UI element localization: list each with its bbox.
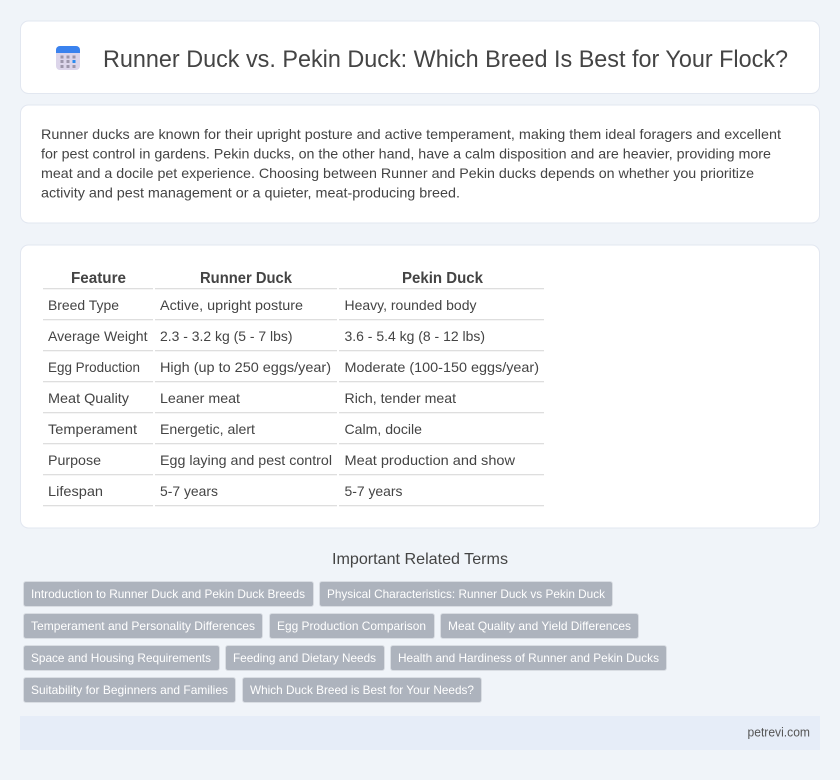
row: egg production <box>48 359 539 375</box>
row: average weight: Average Weight <box>48 328 148 344</box>
title: Runner Duck vs. Pekin Duck: Which Breed Is Best for Your Flock? <box>103 46 788 73</box>
row: average weight <box>48 328 485 344</box>
intro paragraph: Runner ducks are known for their upright posture and active temperament, making them ideal foragers and excellent <box>41 126 781 142</box>
table header row <box>71 270 483 287</box>
row: temperament <box>48 421 422 437</box>
tag list: Egg Production Comparison <box>277 619 426 633</box>
footer <box>20 716 820 750</box>
table header row: Runner Duck <box>200 270 292 287</box>
tag list: Which Duck Breed is Best for Your Needs? <box>250 683 474 697</box>
row: purpose: Purpose <box>48 452 101 468</box>
row: temperament: Energetic, alert <box>160 421 255 437</box>
row: temperament: Temperament <box>48 421 137 437</box>
panel: header <box>20 21 820 94</box>
table header row: Feature <box>71 270 126 287</box>
row: egg production: Egg Production <box>48 359 140 375</box>
intro paragraph: activity and pest management or a quieter, meat-producing breed. <box>41 184 460 200</box>
row: lifespan <box>48 483 402 499</box>
row: purpose <box>48 452 516 468</box>
row: temperament: Calm, docile <box>344 421 422 437</box>
tag list: Health and Hardiness of Runner and Pekin Ducks <box>398 651 659 665</box>
footer: site name: petrevi.com <box>748 726 810 740</box>
tag list: Temperament and Personality Differences <box>31 619 255 633</box>
icon: calendar <box>56 46 80 70</box>
tag list: Meat Quality and Yield Differences <box>448 619 631 633</box>
row: egg production: Moderate (100-150 eggs/year) <box>344 359 539 375</box>
row: lifespan: 5-7 years <box>344 483 402 499</box>
row: purpose: Meat production and show <box>344 452 516 468</box>
tag list: Physical Characteristics: Runner Duck vs Pekin Duck <box>327 587 606 601</box>
tag list <box>24 582 666 702</box>
row: meat quality: Rich, tender meat <box>344 390 456 406</box>
row: lifespan: 5-7 years <box>160 483 218 499</box>
panel: introduction <box>20 105 820 223</box>
tag list: Suitability for Beginners and Families <box>31 683 228 697</box>
intro paragraph: meat and a docile pet experience. Choosing between Runner and Pekin ducks depends on whether you prioritize <box>41 165 754 181</box>
tag list: Space and Housing Requirements <box>31 651 211 665</box>
row: breed type: Breed Type <box>48 297 119 313</box>
row: breed type: Active, upright posture <box>160 297 303 313</box>
row: average weight: 3.6 - 5.4 kg (8 - 12 lbs) <box>344 328 485 344</box>
table header row: Pekin Duck <box>402 270 483 287</box>
row: purpose: Egg laying and pest control <box>160 452 332 468</box>
intro paragraph: for pest control in gardens. Pekin ducks, on the other hand, have a calm disposition and are heavier, providing more <box>41 146 771 162</box>
row: meat quality: Meat Quality <box>48 390 129 406</box>
row: meat quality: Leaner meat <box>160 390 240 406</box>
row: egg production: High (up to 250 eggs/year) <box>160 359 331 375</box>
tag list: Feeding and Dietary Needs <box>233 651 376 665</box>
row: breed type <box>48 297 476 313</box>
tag list: Introduction to Runner Duck and Pekin Duck Breeds <box>31 587 305 601</box>
row: average weight: 2.3 - 3.2 kg (5 - 7 lbs) <box>160 328 292 344</box>
row: lifespan: Lifespan <box>48 483 103 499</box>
row: meat quality <box>48 390 456 406</box>
row: breed type: Heavy, rounded body <box>344 297 476 313</box>
heading: related terms: Important Related Terms <box>332 551 508 568</box>
panel: comparison table <box>20 245 820 528</box>
intro paragraph <box>41 126 781 200</box>
